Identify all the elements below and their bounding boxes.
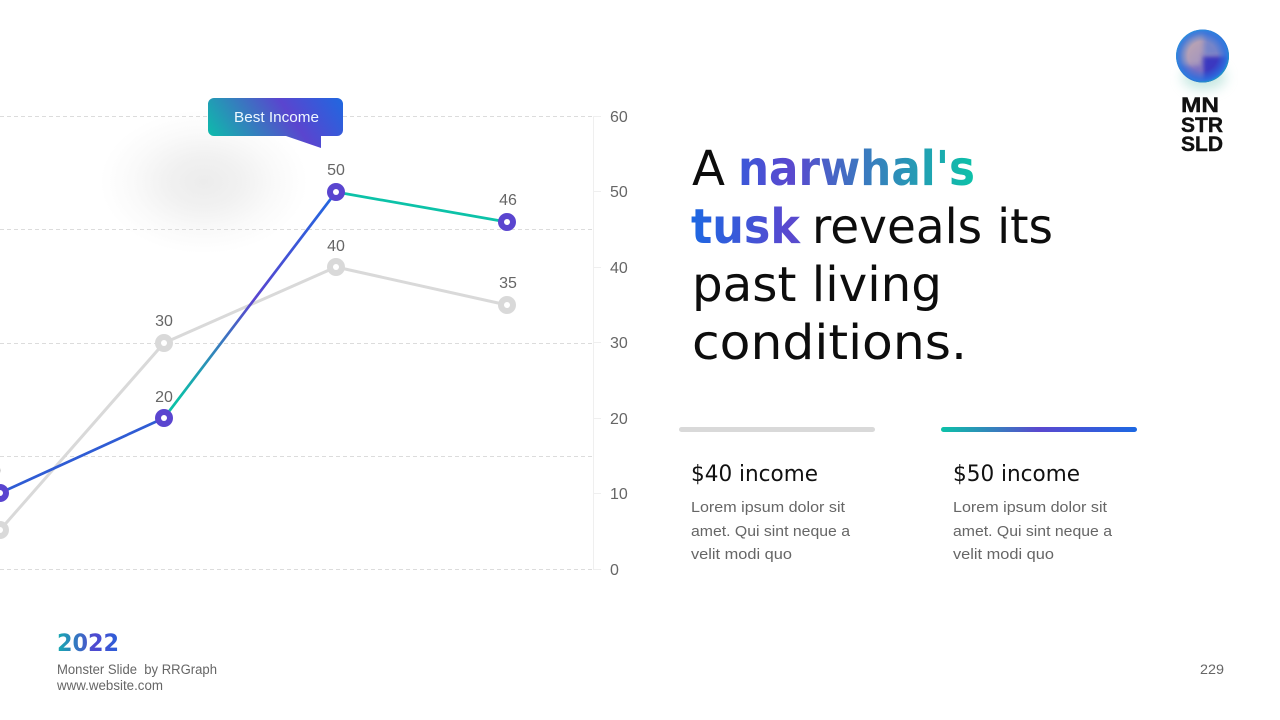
title: past living [692, 257, 942, 313]
value axis labels: 0 [610, 562, 619, 579]
column: $50 income [941, 427, 1137, 563]
data labels: 20 [155, 389, 173, 406]
grid lines [0, 116, 593, 570]
footer: year and credits: Monster Slide by RRGraph [57, 662, 217, 677]
footer: year and credits: www.website.com [56, 678, 163, 693]
column: $40 income: amet. Qui sint neque a [691, 524, 851, 540]
column: $40 income [679, 427, 875, 563]
data labels: 50 [327, 162, 345, 179]
column: $40 income: velit modi quo [691, 547, 792, 563]
data labels: 30 [155, 313, 173, 330]
series: $40 income (grey) [0, 258, 516, 541]
title: conditions. [692, 315, 967, 371]
page number: 229 [1200, 661, 1224, 677]
series: $50 income (gradient) [0, 183, 516, 502]
footer: year and credits: 2022 [57, 629, 119, 657]
column: $50 income: amet. Qui sint neque a [953, 524, 1113, 540]
logo wordmark: STR [1181, 114, 1223, 137]
title: narwhal's [738, 141, 975, 197]
icon: orb [1176, 30, 1232, 90]
data labels: 35 [499, 275, 517, 292]
logo wordmark: MN [1181, 94, 1219, 117]
value axis labels [610, 109, 628, 579]
title: reveals its [812, 199, 1053, 255]
value axis labels: 60 [610, 109, 628, 126]
column: $50 income: $50 income [953, 462, 1080, 487]
callout: best income [208, 98, 343, 148]
value axis labels: 50 [610, 184, 628, 201]
logo [1176, 30, 1232, 156]
column: $40 income: Lorem ipsum dolor sit [691, 500, 845, 516]
title: tusk [691, 199, 801, 255]
title [691, 141, 1053, 371]
data labels: 40 [327, 238, 345, 255]
value axis labels: 20 [610, 411, 628, 428]
value axis labels: 30 [610, 335, 628, 352]
value axis labels: 10 [610, 486, 628, 503]
logo wordmark [1181, 94, 1223, 156]
value axis labels: 40 [610, 260, 628, 277]
logo wordmark: SLD [1181, 133, 1223, 156]
column: $50 income: velit modi quo [953, 547, 1054, 563]
data labels [0, 162, 517, 480]
title: A [692, 141, 725, 197]
data labels: 46 [499, 192, 517, 209]
column: $50 income: Lorem ipsum dolor sit [953, 500, 1107, 516]
column: $40 income: $40 income [691, 462, 818, 487]
callout: best income: Best Income [234, 109, 319, 126]
line chart [0, 109, 628, 579]
value axis line and ticks [593, 116, 601, 570]
soft grey shadow blob [100, 110, 308, 254]
footer: year and credits [56, 629, 217, 693]
